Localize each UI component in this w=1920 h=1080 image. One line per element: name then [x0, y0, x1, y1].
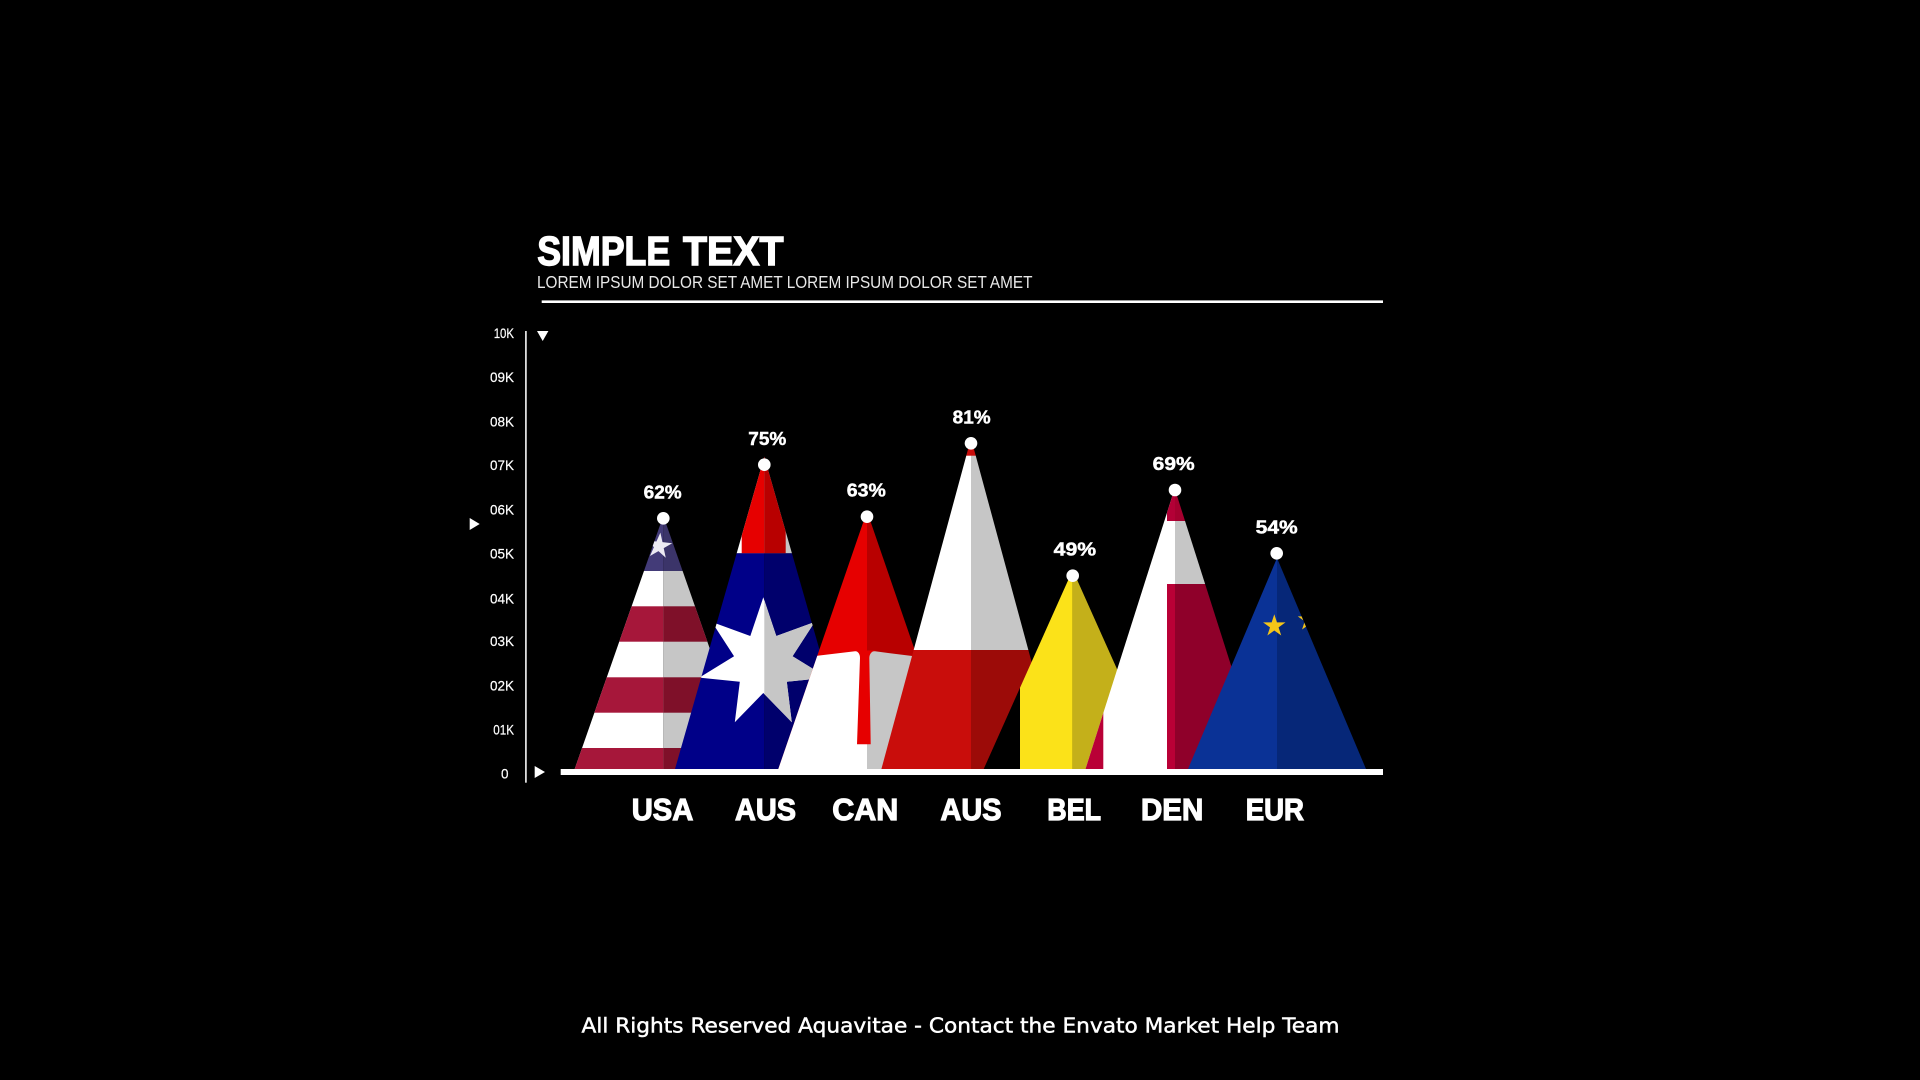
cone: DEN — [1086, 496, 1232, 769]
title — [537, 228, 784, 274]
axis tick labels: 02K — [490, 678, 514, 693]
country labels: BEL — [1047, 792, 1101, 827]
axis tick labels: 09K — [490, 370, 514, 385]
country labels — [632, 792, 1304, 827]
axis tick labels: 01K — [493, 722, 514, 737]
gold star — [1263, 614, 1286, 636]
y axis — [490, 326, 527, 783]
percentage labels: 62% — [644, 482, 682, 502]
percentage labels: 69% — [1153, 454, 1195, 474]
x axis baseline — [561, 769, 1383, 775]
axis tick labels: 03K — [490, 634, 514, 649]
title: SIMPLE — [537, 228, 670, 274]
subtitle: LOREM IPSUM DOLOR SET AMET LOREM IPSUM DOLOR SET AMET — [537, 272, 1033, 292]
cone: USA — [574, 524, 710, 769]
axis tick labels: 08K — [490, 414, 514, 429]
cone: AUS — [675, 456, 820, 769]
country labels: CAN — [832, 792, 898, 827]
axis tick labels: 07K — [490, 458, 514, 473]
percentage labels: 63% — [847, 481, 886, 501]
infographic canvas — [470, 236, 1383, 1038]
percentage labels: 54% — [1256, 517, 1298, 537]
cone: EUR — [1185, 555, 1369, 770]
percentage labels: 75% — [748, 429, 786, 449]
cone: CAN — [778, 522, 914, 769]
country labels: EUR — [1246, 792, 1304, 827]
footer credit: All Rights Reserved Aquavitae - Contact the Envato Market Help Team — [582, 1013, 1340, 1037]
axis tick labels: 05K — [490, 547, 514, 562]
percentage labels: 49% — [1054, 540, 1096, 560]
axis tick labels: 0 — [501, 767, 508, 782]
partial gold star — [1298, 616, 1306, 630]
country labels: DEN — [1141, 792, 1203, 827]
cone: AUS second — [881, 448, 1032, 769]
percentage labels: 81% — [953, 407, 991, 427]
axis tick labels: 10K — [494, 326, 514, 341]
axis tick labels: 06K — [490, 502, 514, 517]
arrow markers — [470, 331, 548, 778]
axis tick labels: 04K — [490, 591, 514, 606]
cone: BEL — [984, 580, 1118, 769]
country labels: AUS — [940, 792, 1002, 827]
seven-point star — [701, 597, 813, 722]
axis tick labels — [490, 326, 514, 782]
percentage labels — [644, 407, 1298, 560]
title: TEXT — [683, 228, 784, 274]
data point dots — [657, 437, 1283, 582]
lower white field — [778, 651, 912, 769]
country labels: USA — [632, 792, 693, 827]
maple stem — [856, 650, 876, 744]
country labels: AUS — [735, 792, 796, 827]
star — [650, 532, 672, 558]
